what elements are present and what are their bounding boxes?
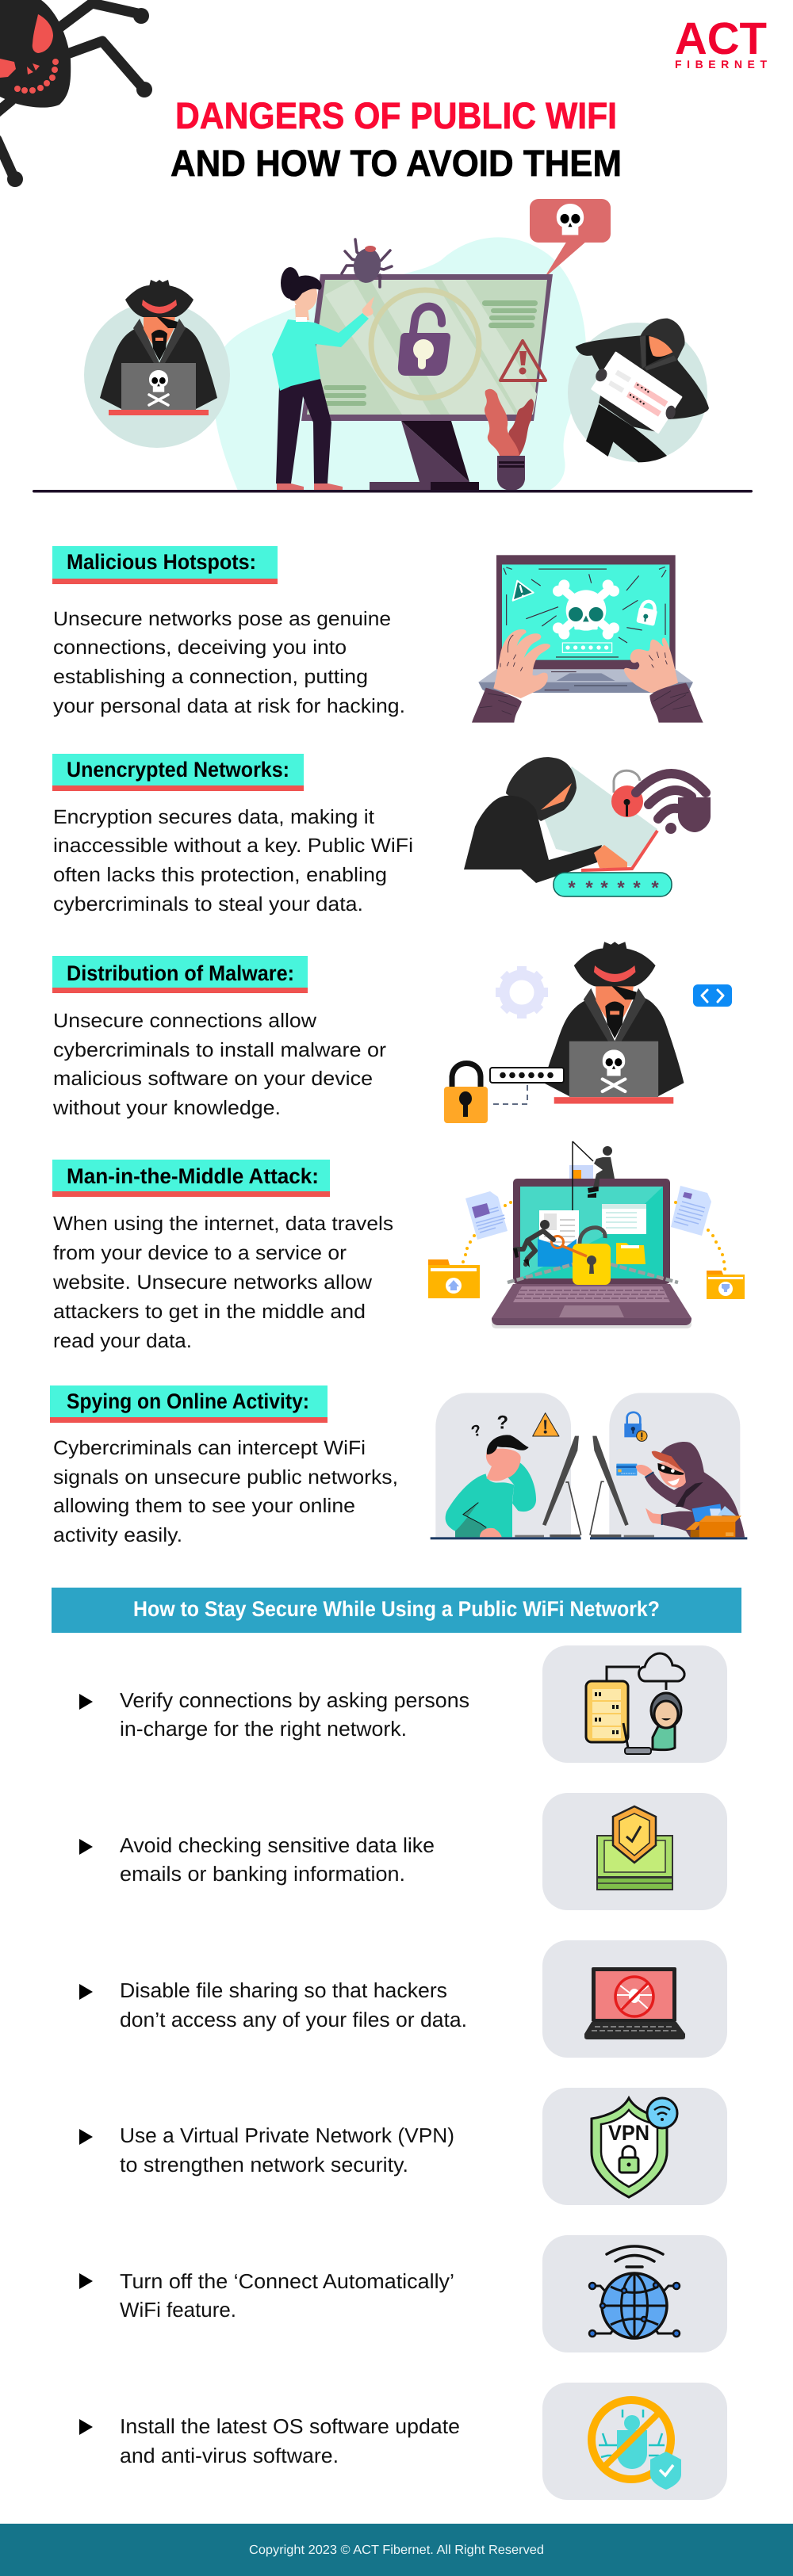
bullet [79, 1694, 93, 1710]
banner: how to stay secure: How to Stay Secure While Using a Public WiFi Network? [133, 1597, 660, 1621]
monitor [301, 274, 553, 491]
tip text: Install the latest OS software update [120, 2414, 460, 2438]
section 4: man in the middle [52, 1141, 745, 1352]
speech bubble with skull [530, 199, 611, 278]
illustration: laptop chained with thieves [428, 1141, 745, 1328]
tip 2 [79, 1793, 727, 1910]
heading [52, 956, 308, 993]
illustration: hacker with lock and password [444, 942, 732, 1123]
body text: Cybercriminals can intercept WiFi [53, 1437, 366, 1459]
section 1: malicious hotspots [52, 546, 703, 723]
body text: your personal data at risk for hacking. [53, 695, 405, 717]
tip text [120, 2414, 460, 2467]
banner: how to stay secure [52, 1588, 741, 1633]
tip 4 [79, 2088, 727, 2205]
bullet [79, 2419, 93, 2435]
bullet [79, 1984, 93, 2000]
skull [566, 590, 606, 631]
icon card: laptop with virus [542, 1940, 727, 2058]
bullet [79, 2273, 93, 2289]
woman pointing [272, 267, 374, 490]
title: DANGERS OF PUBLIC WIFI [175, 94, 617, 136]
hooded hacker right [568, 319, 709, 462]
hands [472, 629, 703, 723]
ground line [33, 490, 753, 493]
tip text: and anti-virus software. [120, 2444, 339, 2467]
blue padlock [624, 1412, 647, 1441]
hero illustration [33, 199, 753, 493]
title: AND HOW TO AVOID THEM [170, 142, 622, 184]
heading: Distribution of Malware: [67, 961, 294, 985]
thief with key [513, 1220, 554, 1267]
plant [485, 389, 534, 491]
illustration: hooded hacker and padlocked wifi: * [585, 877, 593, 899]
body text [52, 1010, 386, 1119]
body text: signals on unsecure public networks, [53, 1466, 398, 1489]
credit card [616, 1464, 637, 1476]
footer [0, 2524, 793, 2576]
heading: Malicious Hotspots: [67, 550, 256, 574]
illustration: victim and thief at monitors [431, 1393, 747, 1539]
monitors [431, 1436, 747, 1539]
tip text: Avoid checking sensitive data like [120, 1833, 435, 1857]
tip text: Verify connections by asking persons [120, 1688, 469, 1712]
illustration: hands on laptop with skull [472, 555, 703, 723]
illustration: hooded hacker and padlocked wifi [464, 757, 711, 899]
question marks [469, 1412, 508, 1440]
question marks: ? [469, 1420, 484, 1440]
heading: Man-in-the-Middle Attack: [67, 1164, 319, 1188]
hacker left [84, 280, 230, 448]
tip text: in-charge for the right network. [120, 1717, 407, 1741]
tip text [120, 1833, 435, 1886]
dotted paths [462, 1201, 726, 1271]
heading [52, 546, 278, 584]
padlock [444, 1064, 488, 1123]
folders [428, 1259, 745, 1299]
body text: from your device to a service or [53, 1242, 347, 1264]
logo: ACT Fibernet: FIBERNET [675, 58, 767, 71]
tip text: Use a Virtual Private Network (VPN) [120, 2123, 454, 2147]
body text [53, 1437, 398, 1546]
illustration: hooded hacker and padlocked wifi: * [651, 877, 659, 899]
tip text: Turn off the ‘Connect Automatically’ [120, 2269, 454, 2293]
footer: Copyright 2023 © ACT Fibernet. All Right Reserved [249, 2544, 544, 2557]
heading [52, 754, 304, 791]
body text [53, 806, 413, 915]
tip text [120, 1978, 467, 2031]
body text: cybercriminals to steal your data. [53, 893, 363, 915]
code button [693, 984, 732, 1007]
chains [508, 1264, 678, 1282]
section 3: distribution of malware [52, 942, 732, 1123]
tip 6 [79, 2383, 727, 2500]
body text: without your knowledge. [52, 1097, 281, 1119]
body text: inaccessible without a key. Public WiFi [53, 835, 413, 857]
icon card: VPN shield: VPN [608, 2121, 649, 2145]
tip text: emails or banking information. [120, 1862, 405, 1886]
body text [53, 608, 405, 717]
tip text: WiFi feature. [120, 2298, 236, 2322]
tip text: to strengthen network security. [120, 2153, 408, 2177]
tip 5 [79, 2235, 727, 2352]
body text: establishing a connection, putting [53, 666, 368, 688]
bullet [79, 2129, 93, 2145]
body text: malicious software on your device [53, 1068, 373, 1090]
yellow padlock [573, 1228, 611, 1285]
illustration: hooded hacker and padlocked wifi: * [633, 877, 641, 899]
section 2: unencrypted networks [52, 754, 711, 915]
warning sign [533, 1413, 559, 1436]
tip text: don’t access any of your files or data. [120, 2008, 467, 2031]
heading [52, 1160, 330, 1197]
body text: cybercriminals to install malware or [53, 1039, 386, 1061]
body text: activity easily. [53, 1524, 182, 1546]
tip text [120, 1688, 469, 1741]
body text: often lacks this protection, enabling [53, 864, 387, 886]
body text [52, 1213, 393, 1352]
body text: allowing them to see your online [53, 1495, 355, 1517]
bullet [79, 1839, 93, 1855]
background blob [213, 237, 586, 491]
illustration: hooded hacker and padlocked wifi: * [617, 877, 625, 899]
title [170, 94, 622, 184]
tip text: Disable file sharing so that hackers [120, 1978, 447, 2002]
body text: website. Unsecure networks allow [52, 1271, 373, 1294]
body text: Unsecure networks pose as genuine [53, 608, 391, 630]
icon card: VPN shield [542, 2088, 727, 2205]
heading: Spying on Online Activity: [67, 1389, 309, 1413]
floating documents [465, 1186, 711, 1240]
body text: read your data. [53, 1330, 192, 1352]
illustration: hooded hacker and padlocked wifi: * [600, 877, 608, 899]
illustration: hooded hacker and padlocked wifi: * [568, 877, 576, 899]
body text: Unsecure connections allow [53, 1010, 317, 1032]
logo: ACT Fibernet: ACT [675, 13, 767, 64]
thief [636, 1442, 745, 1537]
fishing thief [573, 1141, 615, 1210]
tip text [120, 2269, 454, 2322]
tip 1 [79, 1645, 727, 1763]
section 5: spying on online activity [50, 1385, 747, 1546]
body text: Encryption secures data, making it [53, 806, 374, 828]
tip text [120, 2123, 454, 2177]
question marks: ? [496, 1412, 508, 1433]
body text: connections, deceiving you into [53, 636, 347, 659]
icon card: money and shield [542, 1793, 727, 1910]
documents on screen [539, 1204, 646, 1252]
icon card: connected globe [542, 2235, 727, 2352]
body text: attackers to get in the middle and [53, 1301, 366, 1323]
bug on monitor [342, 239, 392, 287]
box of files [686, 1504, 741, 1537]
crossbones [553, 579, 619, 640]
key [552, 1236, 587, 1256]
body text: When using the internet, data travels [53, 1213, 393, 1235]
spider top left [0, 0, 152, 187]
gear [496, 966, 548, 1019]
tip 3 [79, 1940, 727, 2058]
icon card: server and person [542, 1645, 727, 1763]
heading: Unencrypted Networks: [67, 758, 289, 782]
password box [490, 1068, 564, 1083]
icon card: no bug with shield [542, 2383, 727, 2500]
heading [50, 1385, 328, 1423]
